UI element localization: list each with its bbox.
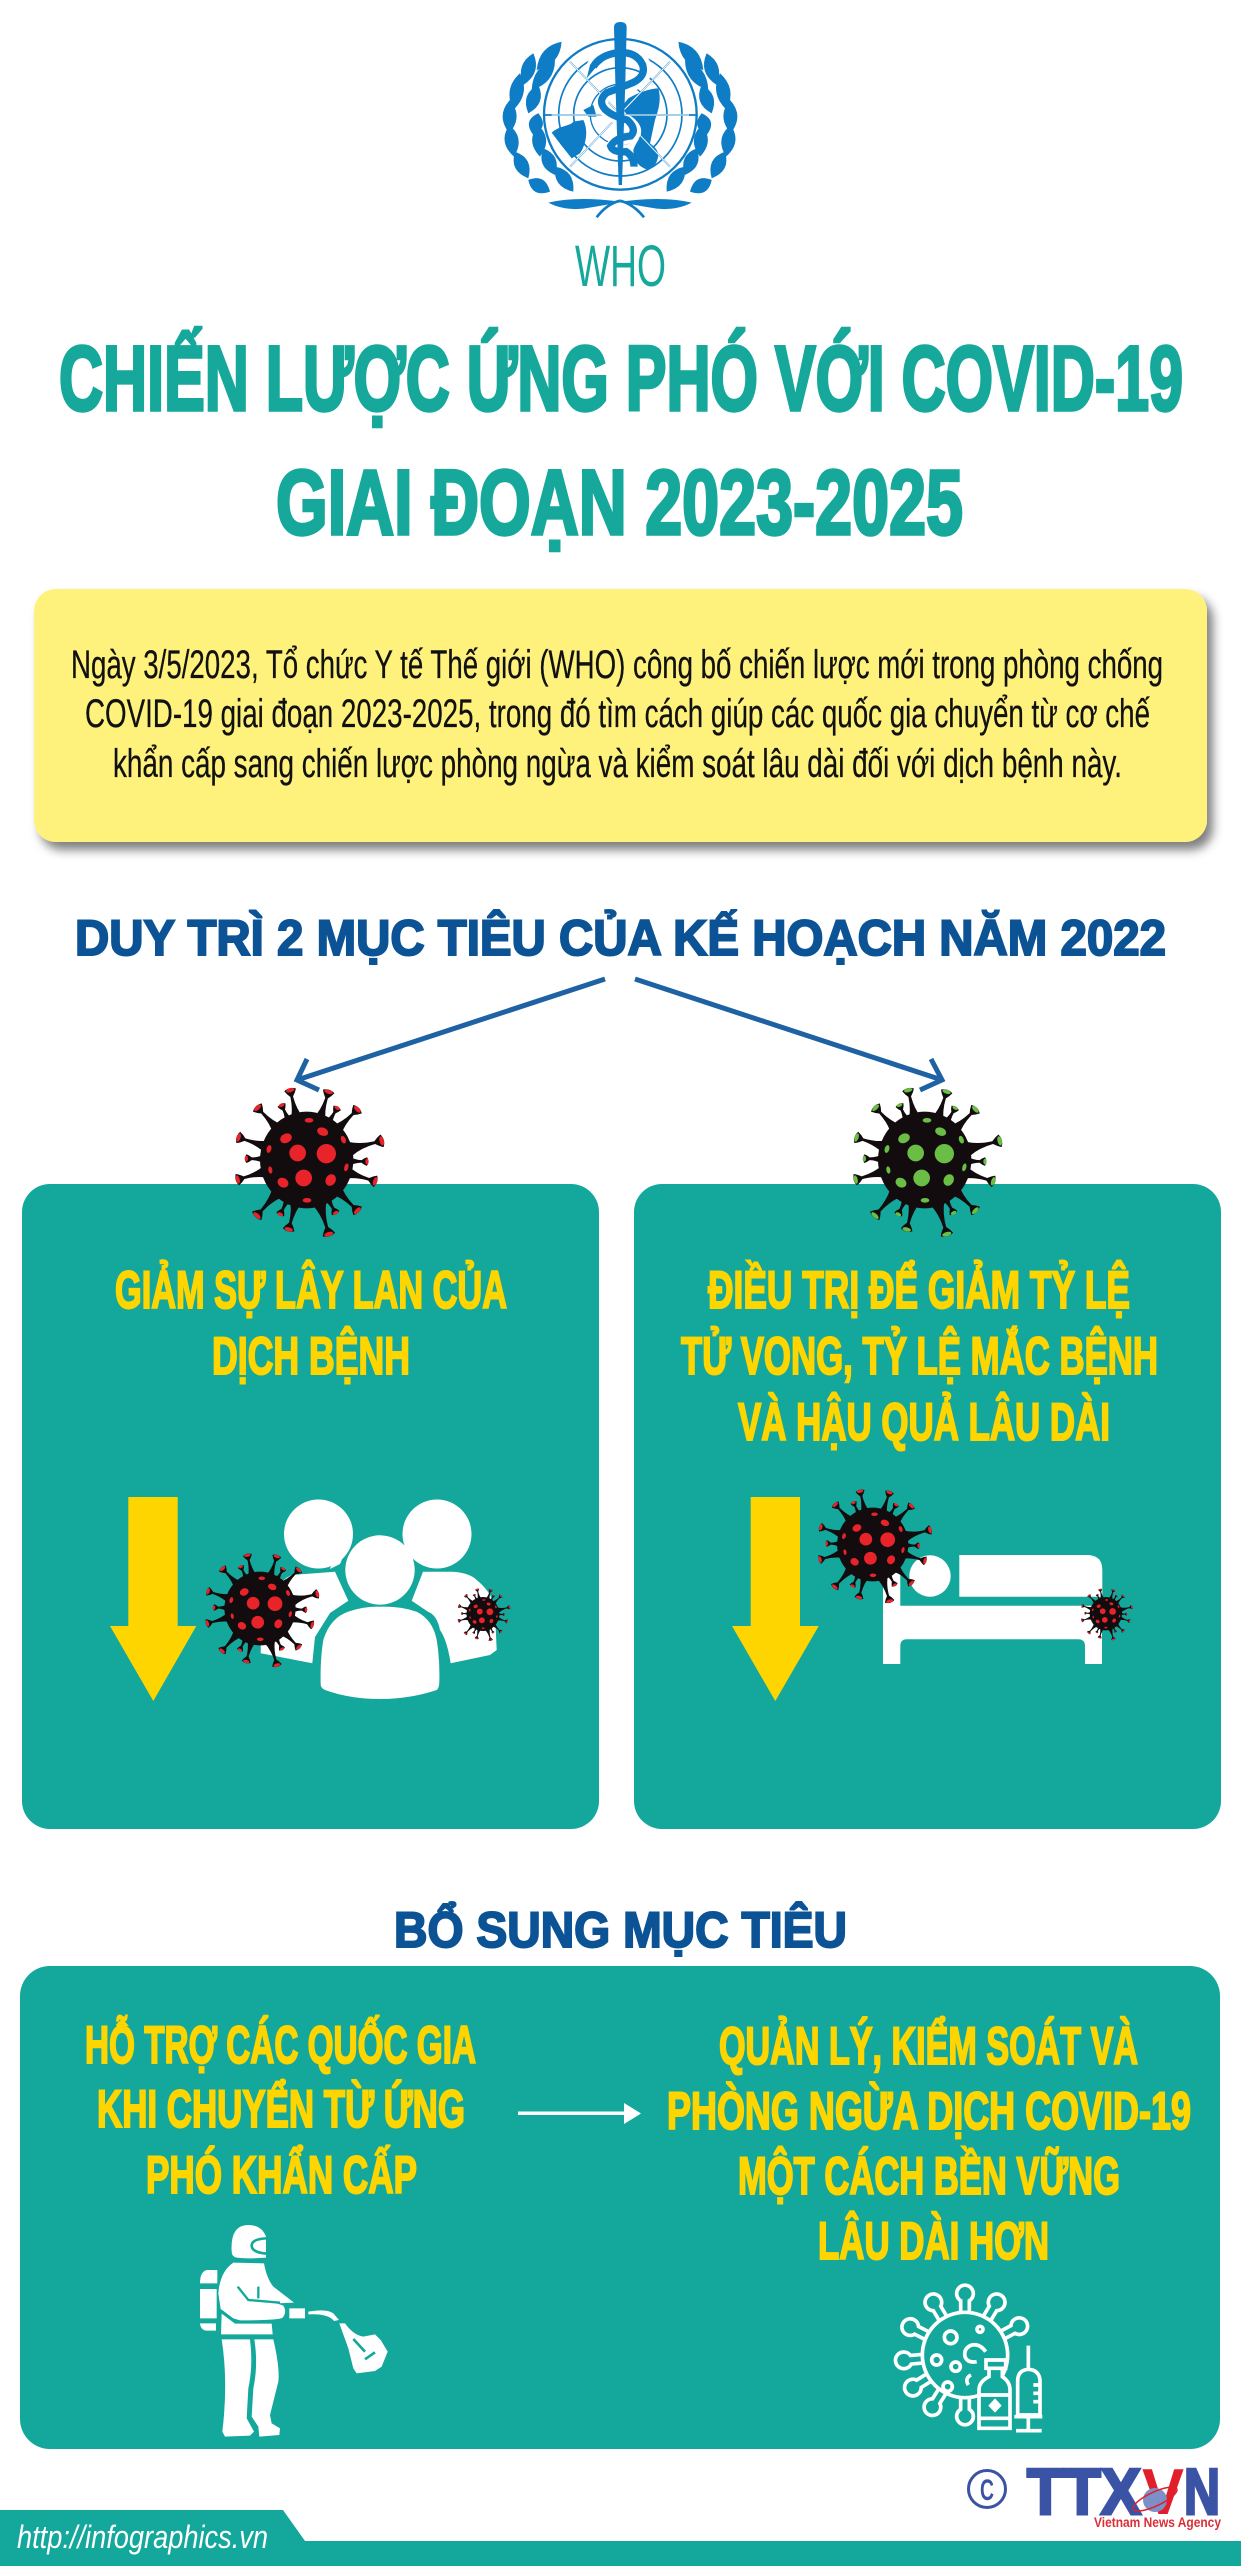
icon: down arrow bbox=[732, 1497, 819, 1701]
panel: goal 1 bbox=[22, 1184, 599, 1829]
icon: small virus on bed bbox=[1081, 1588, 1133, 1641]
icon: virus over people bbox=[204, 1553, 320, 1668]
icon: WHO emblem bbox=[502, 22, 738, 217]
WHO label: WHO bbox=[575, 234, 666, 299]
text: support countries: HỖ TRỢ CÁC QUỐC GIA bbox=[85, 2014, 476, 2075]
panel: goal 1: GIẢM SỰ LÂY LAN CỦA bbox=[115, 1259, 507, 1320]
footer link: http://infographics.vn bbox=[17, 2519, 268, 2555]
arrow: transition bbox=[518, 2103, 641, 2124]
panel: goal 2 bbox=[634, 1184, 1221, 1829]
panel: intro callout bbox=[34, 589, 1207, 842]
icon: virus over bed bbox=[817, 1489, 933, 1604]
heading: additional goals: BỔ SUNG MỤC TIÊU bbox=[394, 1901, 847, 1958]
logo: TTXVN: TTX bbox=[1027, 2455, 1141, 2528]
logo: TTXVN: Vietnam News Agency bbox=[1094, 2514, 1221, 2530]
panel: additional goals bbox=[20, 1966, 1220, 2449]
text: sustainable management bbox=[667, 2016, 1191, 2271]
icon: red virus bbox=[234, 1087, 386, 1238]
arrow: to left goal bbox=[297, 979, 605, 1090]
icon: copyright mark bbox=[968, 2470, 1006, 2508]
icon: small virus bbox=[457, 1588, 511, 1642]
title: GIAI ĐOẠN 2023-2025 bbox=[276, 452, 963, 554]
text: support countries: KHI CHUYỂN TỪ ỨNG bbox=[97, 2079, 465, 2139]
icon: virus vaccine bbox=[895, 2285, 1042, 2431]
icon: disinfection worker bbox=[200, 2225, 388, 2437]
logo: TTXVN: N bbox=[1184, 2455, 1220, 2528]
icon: group of people bbox=[261, 1500, 497, 1699]
text: support countries: PHÓ KHẨN CẤP bbox=[146, 2145, 417, 2205]
icon: down arrow bbox=[110, 1497, 196, 1701]
icon: hospital bed bbox=[883, 1555, 1102, 1664]
heading: maintain 2 goals: DUY TRÌ 2 MỤC TIÊU CỦA KẾ HOẠCH NĂM 2022 bbox=[75, 909, 1166, 966]
logo: TTXVN bbox=[1027, 2455, 1221, 2530]
panel: goal 1: DỊCH BỆNH bbox=[212, 1325, 410, 1386]
logo: TTXVN: V bbox=[1142, 2455, 1184, 2528]
icon: copyright mark: C bbox=[980, 2474, 994, 2507]
text: sustainable management: LÂU DÀI HƠN bbox=[818, 2210, 1049, 2271]
title bbox=[59, 327, 1183, 554]
footer bar bbox=[0, 2510, 1241, 2566]
text: support countries bbox=[85, 2014, 476, 2205]
icon: green virus bbox=[852, 1087, 1004, 1238]
arrow: to right goal bbox=[635, 979, 942, 1090]
